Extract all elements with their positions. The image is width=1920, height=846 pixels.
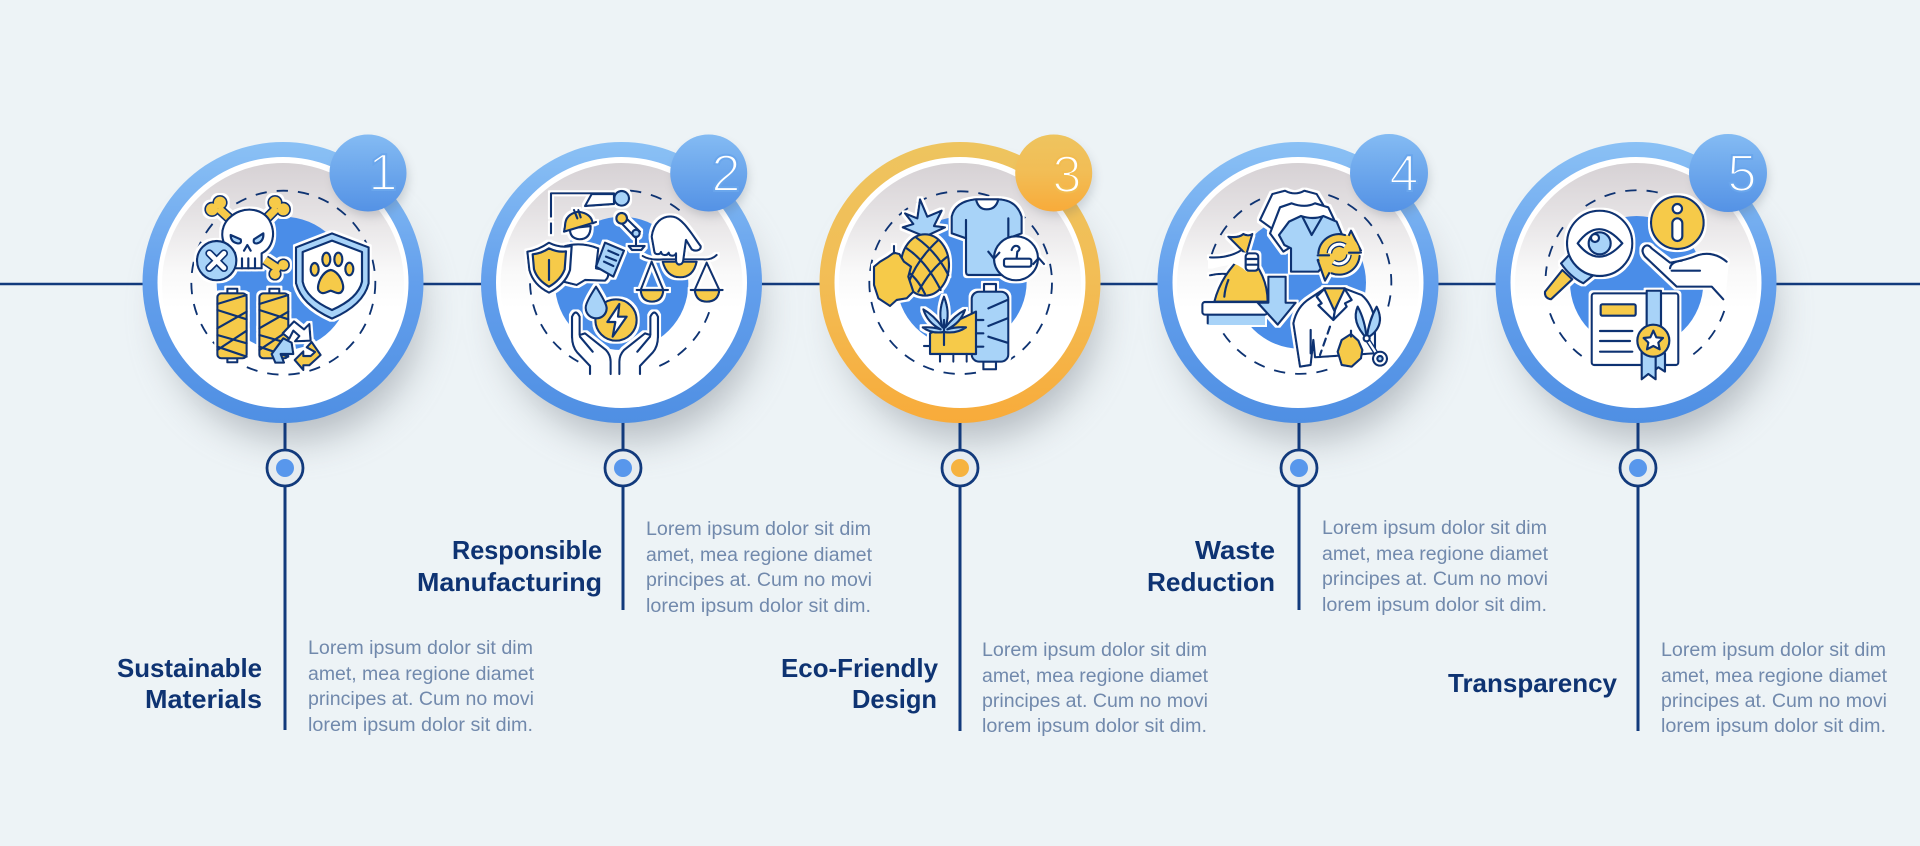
connector dot 4	[1281, 450, 1317, 486]
icon: open hand	[1642, 245, 1727, 299]
connector dot 1	[267, 450, 303, 486]
icon: open hands	[572, 312, 658, 374]
icon: worker with helmet	[563, 210, 624, 285]
body text 4: amet, mea regione diamet	[1322, 544, 1549, 565]
number badge 3: 3	[1053, 146, 1081, 204]
connector dot 2	[605, 450, 641, 486]
ring 5	[1496, 142, 1776, 423]
body text 5: Lorem ipsum dolor sit dim	[1661, 640, 1886, 661]
heading 1: Sustainable	[117, 653, 262, 683]
icon: magnifier with eye	[1545, 211, 1632, 299]
body text 1: lorem ipsum dolor sit dim.	[308, 715, 533, 736]
body text 1: principes at. Cum no movi	[308, 689, 534, 710]
connector dot 3	[942, 450, 978, 486]
connector line 1	[284, 420, 286, 730]
heading 1: Materials	[145, 684, 262, 714]
icon: hanger cycle	[988, 236, 1044, 280]
body text 2: Lorem ipsum dolor sit dim	[646, 519, 871, 540]
icon: waste reduction	[1202, 191, 1391, 374]
icon: shield with paw	[296, 233, 369, 319]
connector line 4	[1298, 420, 1300, 610]
ring 1	[142, 142, 424, 423]
icon: transparency	[1545, 190, 1727, 379]
body text 5	[1661, 640, 1888, 737]
number badge 1: 1	[369, 144, 397, 202]
panel: step 1 sustainable materials	[117, 134, 535, 736]
body text 5: lorem ipsum dolor sit dim.	[1661, 716, 1886, 737]
body text 4	[1322, 518, 1549, 616]
number badge 1	[330, 134, 408, 216]
connector line 5	[1636, 420, 1640, 731]
icon: spool	[972, 284, 1008, 369]
body text 3: principes at. Cum no movi	[982, 691, 1208, 712]
body text 3: Lorem ipsum dolor sit dim	[982, 640, 1207, 661]
body text 5: amet, mea regione diamet	[1661, 666, 1888, 687]
icon: down arrow	[1258, 277, 1296, 325]
icon: fabric and hemp leaf	[923, 297, 983, 362]
icon: trash bag and hand	[1210, 234, 1268, 302]
icon: leather jacket	[1293, 288, 1375, 367]
heading 3	[781, 653, 939, 714]
body text 4: Lorem ipsum dolor sit dim	[1322, 518, 1547, 539]
heading 2: Responsible	[452, 535, 602, 565]
icon: robot arm	[551, 191, 645, 250]
number badge 5: 5	[1728, 145, 1756, 203]
body text 1: amet, mea regione diamet	[308, 664, 535, 685]
heading 4	[1147, 535, 1275, 597]
panel: step 2 responsible manufacturing	[417, 134, 873, 617]
icon: info coin	[1651, 196, 1704, 249]
panel: step 5 transparency	[1448, 134, 1888, 737]
connector line 2	[622, 420, 624, 610]
body text 2: amet, mea regione diamet	[646, 545, 873, 566]
circle shadows	[165, 184, 1774, 440]
body text 3	[982, 640, 1209, 737]
number badge 2	[670, 134, 748, 216]
number badge 5	[1689, 134, 1768, 216]
heading 4: Reduction	[1147, 567, 1275, 597]
panel: step 3 eco-friendly design	[781, 134, 1209, 737]
ring 3	[820, 142, 1100, 423]
icon: leather patch	[1338, 331, 1362, 367]
icon: thread spools	[217, 289, 288, 362]
body text 1: Lorem ipsum dolor sit dim	[308, 638, 533, 659]
heading 2	[417, 535, 602, 597]
body text 3: lorem ipsum dolor sit dim.	[982, 716, 1207, 737]
icon: safety shield	[527, 243, 572, 293]
ring 2	[481, 142, 762, 423]
body text 4: principes at. Cum no movi	[1322, 569, 1548, 590]
body text 1	[308, 638, 535, 736]
icon: bones	[204, 195, 291, 281]
icon: cross mark	[197, 241, 236, 280]
icon: leather hide	[874, 246, 913, 306]
heading 4: Waste	[1195, 535, 1275, 565]
icon: stack of shirts	[1260, 191, 1344, 272]
heading 5: Transparency	[1448, 668, 1618, 698]
icon: drop and energy	[586, 287, 637, 341]
number badge 2: 2	[712, 145, 740, 203]
body text 2	[646, 519, 873, 617]
number badge 4: 4	[1390, 145, 1418, 203]
connector dot 5	[1620, 450, 1656, 486]
icon: scales and pointing hand	[637, 216, 723, 302]
connector line 3	[958, 420, 962, 731]
number badge 4	[1350, 134, 1429, 216]
icon: factory, worker, scales, resources	[527, 191, 723, 374]
heading 2: Manufacturing	[417, 567, 602, 597]
icon: pineapple	[901, 199, 949, 296]
icon: t-shirt	[952, 199, 1022, 275]
icon: shelf	[1202, 302, 1267, 325]
heading 3: Design	[852, 684, 937, 714]
body text 3: amet, mea regione diamet	[982, 666, 1209, 687]
icon: refresh arrows	[1318, 231, 1361, 281]
panel: step 4 waste reduction	[1147, 134, 1549, 616]
icon: recycling arrows	[272, 321, 321, 370]
body text 2: lorem ipsum dolor sit dim.	[646, 596, 871, 617]
heading 3: Eco-Friendly	[781, 653, 939, 683]
icon: skull	[222, 210, 273, 268]
icon: skull, thread, shield, recycling	[191, 191, 375, 375]
icon: certificate	[1592, 291, 1678, 379]
ring 4	[1158, 142, 1438, 423]
icon: scissors	[1356, 307, 1387, 366]
heading 1	[117, 653, 262, 714]
body text 5: principes at. Cum no movi	[1661, 691, 1887, 712]
body text 4: lorem ipsum dolor sit dim.	[1322, 595, 1547, 616]
timeline: horizontal line	[0, 283, 1920, 285]
icon: eco materials and clothing	[869, 191, 1052, 374]
body text 2: principes at. Cum no movi	[646, 570, 872, 591]
number badge 3	[1015, 134, 1094, 216]
